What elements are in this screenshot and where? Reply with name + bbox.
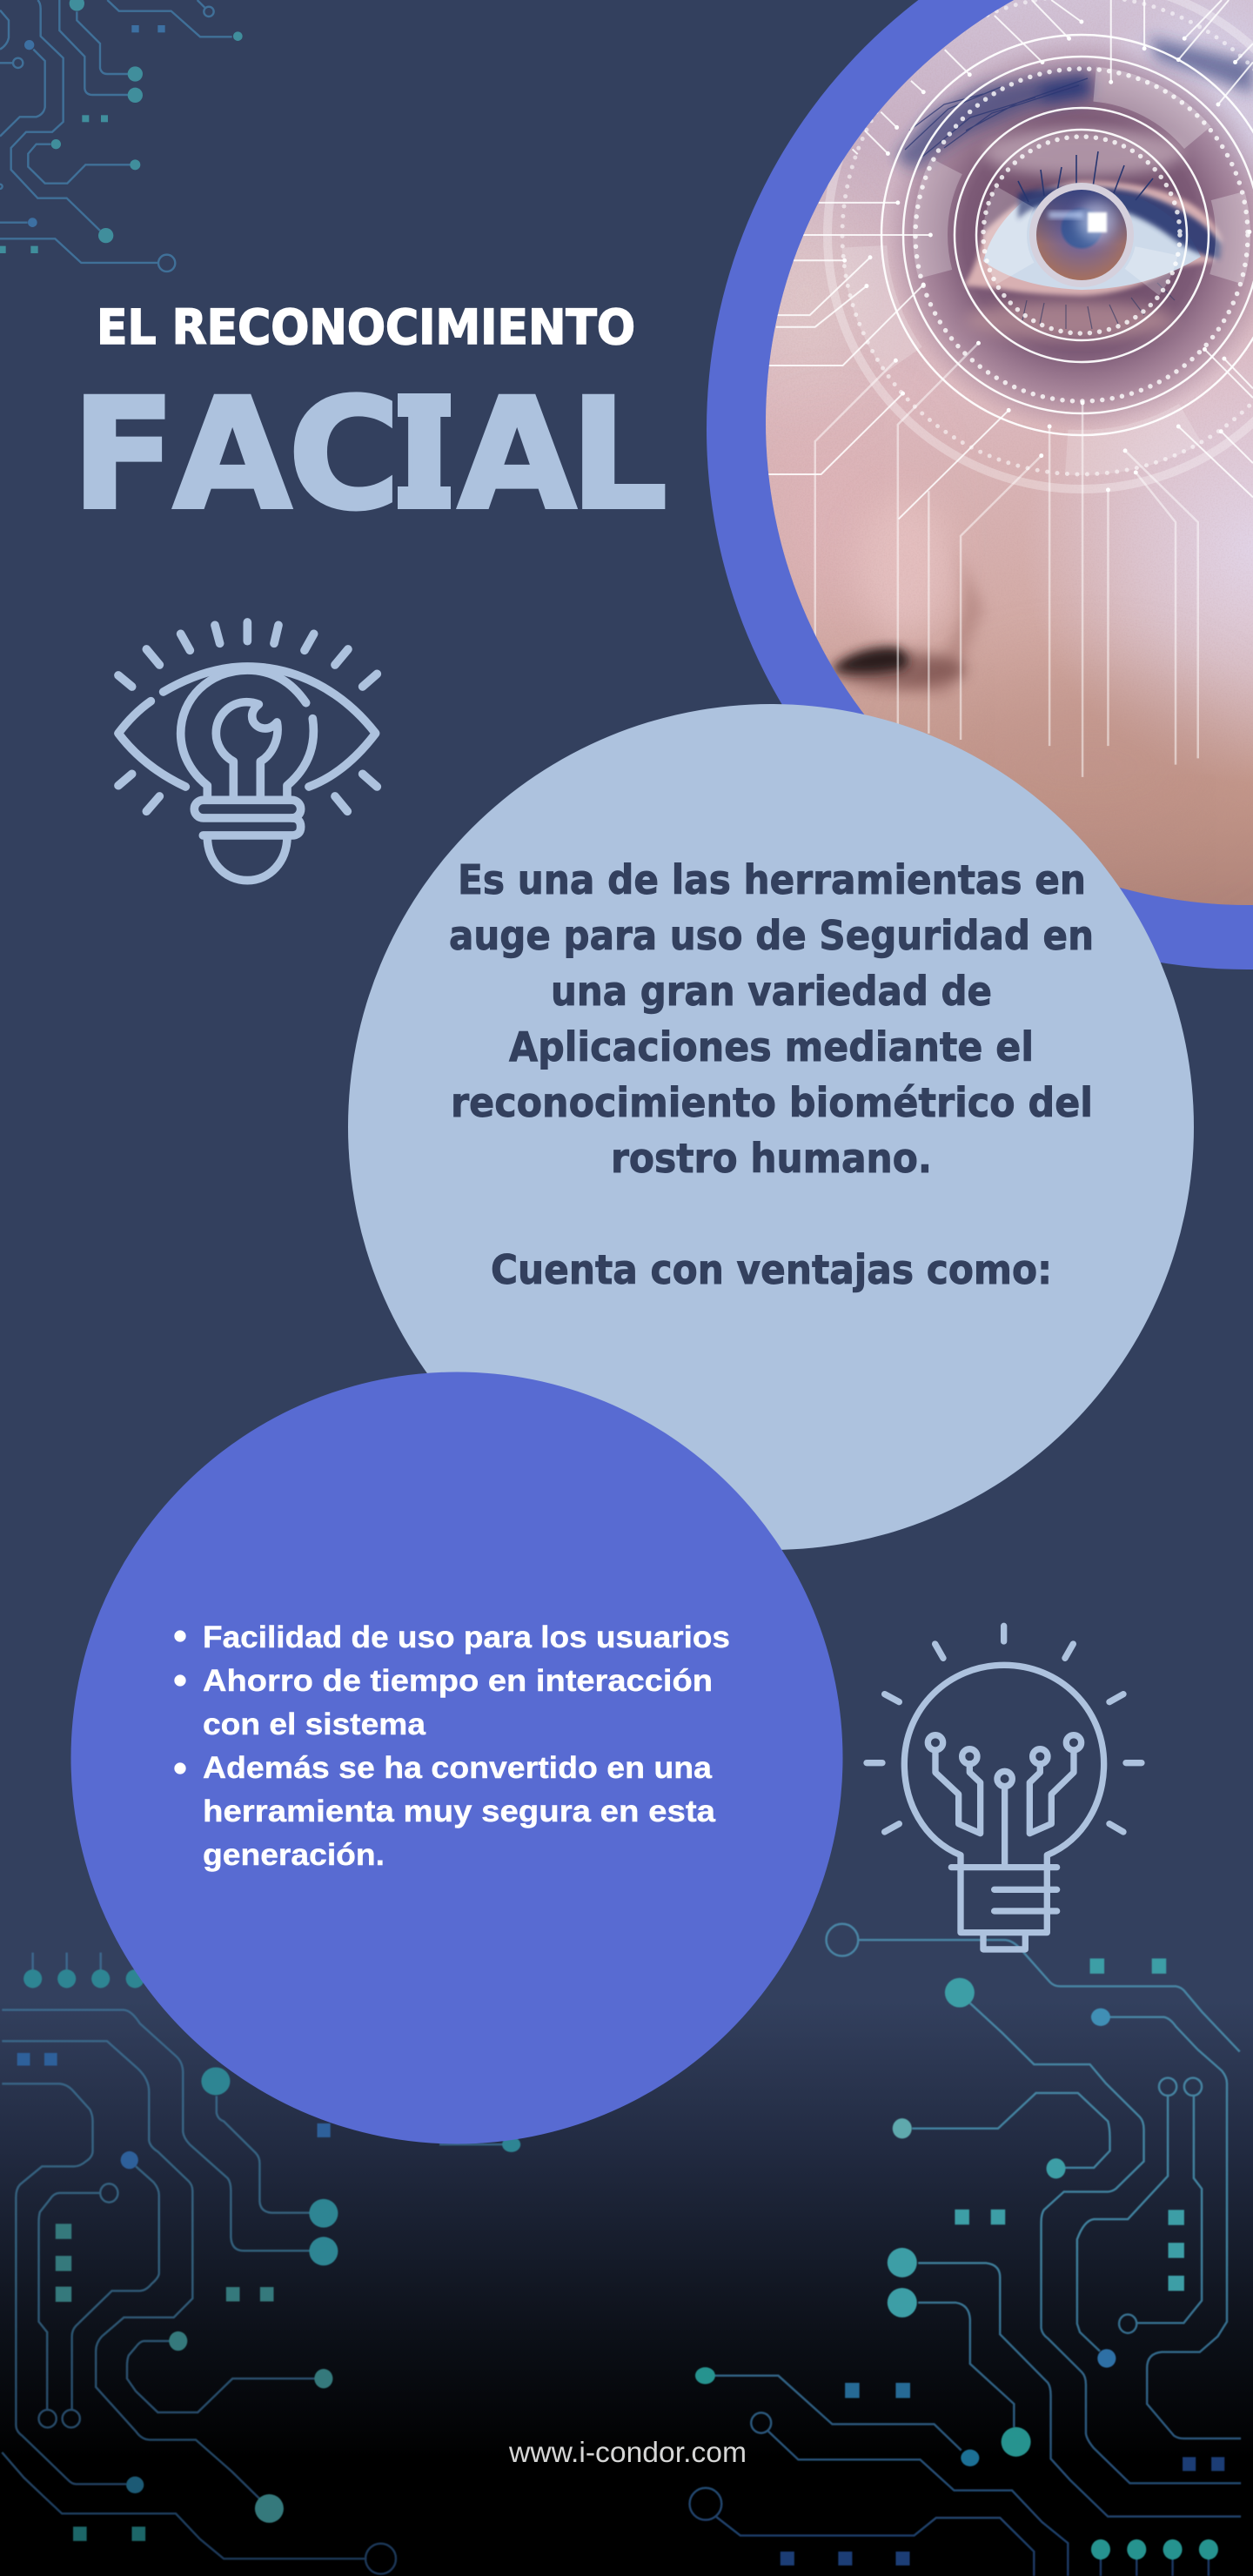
circuit decoration: top left xyxy=(0,0,243,272)
text block: description: Cuenta con ventajas como: xyxy=(491,1246,1052,1293)
list: advantages xyxy=(174,1620,730,1872)
scan overlay: dotted rings xyxy=(842,0,1253,474)
title: FACIAL: FACIAL xyxy=(71,366,667,544)
eye socket xyxy=(886,39,1253,431)
text block: description xyxy=(449,856,1094,1293)
icon: light bulb with circuit xyxy=(867,1626,1142,1949)
text block: description: auge para uso de Seguridad en xyxy=(449,912,1094,959)
nose and nostril xyxy=(828,566,985,700)
eyebrow xyxy=(895,37,1253,170)
icon: eye with light bulb and wrench xyxy=(118,622,377,881)
skin xyxy=(753,0,1253,914)
text block: description: Es una de las herramientas en xyxy=(458,856,1086,903)
photo frame: blue ring circle xyxy=(707,0,1253,969)
lower lid skin xyxy=(966,301,1175,339)
photo: close-up of a face with biometric scan overlay xyxy=(753,0,1253,914)
text block: description: una gran variedad de xyxy=(551,968,992,1015)
list: advantages: Ahorro de tiempo en interacción xyxy=(203,1664,713,1698)
bullet 1 xyxy=(174,1631,186,1641)
list: advantages: herramienta muy segura en esta xyxy=(203,1794,716,1828)
panel: light blue description circle xyxy=(348,704,1194,1550)
text block: description: rostro humano. xyxy=(611,1135,932,1182)
circuit decoration: bottom right xyxy=(690,1924,1241,2576)
scan overlay: circuit lines xyxy=(767,0,1253,777)
bullet 3 xyxy=(174,1763,186,1774)
list: advantages: Facilidad de uso para los usuarios xyxy=(203,1620,730,1654)
scan overlay: concentric rings xyxy=(881,35,1253,435)
list: advantages: generación. xyxy=(203,1838,385,1872)
text block: description: Aplicaciones mediante el xyxy=(509,1023,1034,1070)
upper lid skin xyxy=(983,128,1183,177)
title: line 1: EL RECONOCIMIENTO xyxy=(97,299,635,355)
circuit decoration: bottom left xyxy=(2,1953,520,2574)
bullet 2 xyxy=(174,1674,186,1687)
list: advantages: Además se ha convertido en una xyxy=(203,1751,713,1785)
list: advantages: con el sistema xyxy=(203,1707,426,1741)
eye xyxy=(964,151,1223,329)
text block: description: reconocimiento biométrico del xyxy=(451,1079,1093,1126)
footer: website: www.i-condor.com xyxy=(508,2436,747,2468)
panel: purple advantages circle xyxy=(71,1372,842,2144)
scan overlay: translucent segments xyxy=(828,0,1253,489)
